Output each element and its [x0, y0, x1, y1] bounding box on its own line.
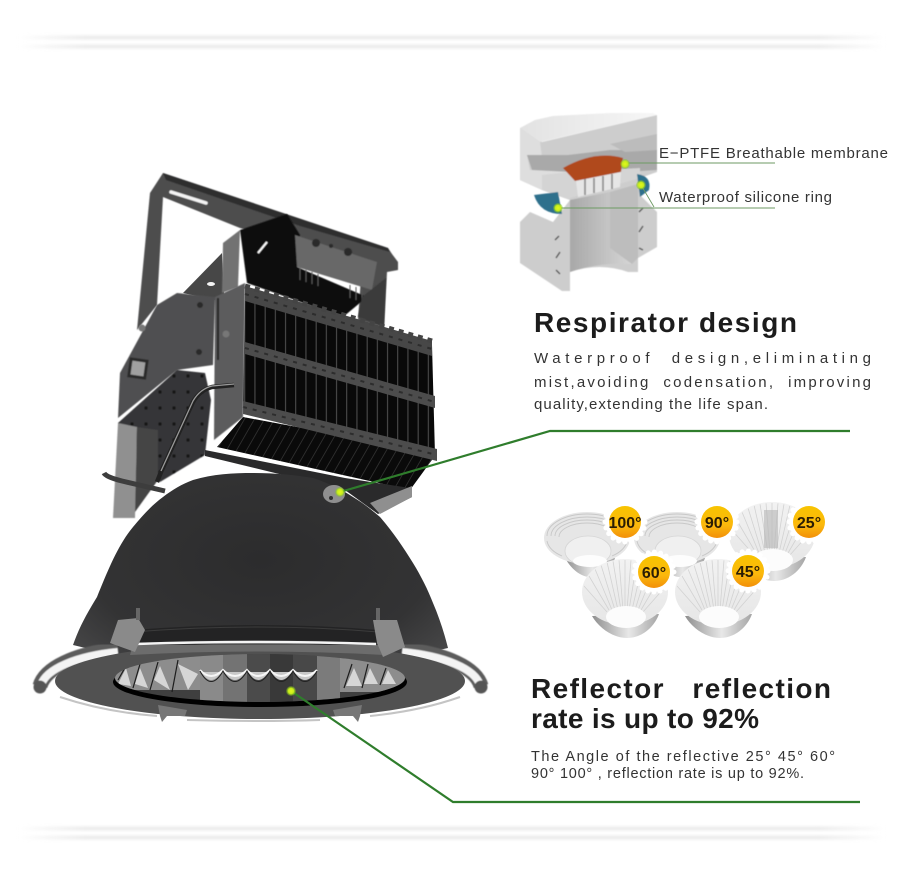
inner cavity: [570, 192, 632, 272]
text: respirator description: [534, 350, 871, 413]
left screw: [136, 608, 140, 620]
inner wall: [610, 184, 638, 264]
dark plate: [55, 643, 465, 719]
marker: reflector: [286, 686, 296, 696]
right clip: [373, 620, 405, 657]
front opening: [113, 654, 407, 707]
seal left: [534, 192, 562, 214]
badge: 90: [697, 502, 737, 542]
underside plate: [205, 450, 412, 514]
side mount plates: [113, 283, 245, 518]
badge: 45: [728, 551, 768, 591]
base plate below heat sink: [370, 486, 412, 514]
text: reflector description: 90° 100° , reflection rate is up to 92%.: [531, 766, 804, 782]
heading: reflector: rate is up to 92%: [531, 703, 759, 734]
badge: 100: 100°: [608, 515, 642, 532]
mounting bracket: [137, 173, 398, 330]
membrane: [563, 156, 623, 181]
cable: [157, 384, 234, 482]
badge: 60: 60°: [642, 565, 666, 582]
badge: 25: 25°: [797, 515, 821, 532]
cup: 45: [675, 559, 761, 638]
text: reflector description: The Angle of the reflective 25° 45° 60°: [531, 749, 835, 765]
vent marks: [555, 208, 643, 274]
main fins: [243, 288, 435, 455]
badge: 100: [605, 502, 645, 542]
cap left: [520, 128, 570, 190]
slot: [527, 150, 657, 172]
teeth: [576, 172, 621, 197]
upper heat sink: [222, 214, 386, 327]
lower clips: [158, 705, 362, 722]
heading: reflector: [531, 673, 831, 734]
badge: 25: [789, 502, 829, 542]
marker: respirator: [335, 487, 345, 497]
cable handle: [104, 473, 165, 491]
breather valve: [323, 485, 345, 503]
leader line: reflector: [291, 691, 860, 802]
cup: 90: [634, 512, 720, 577]
text: respirator description: Waterproof design,eliminating: [534, 350, 871, 367]
heading: respirator design: Respirator design: [534, 307, 797, 338]
bottom divider: [18, 827, 886, 839]
back plate: [183, 253, 224, 300]
text: respirator description: quality,extending the life span.: [534, 396, 768, 413]
dome: [73, 473, 448, 690]
cup: 25: [729, 502, 815, 581]
left clip: [110, 618, 145, 652]
badge: 90: 90°: [705, 515, 729, 532]
silver ring: [34, 649, 488, 694]
bottom fins: [217, 417, 437, 490]
respirator cutaway diagram: [520, 113, 657, 291]
text: respirator description: mist,avoiding codensation, improving: [534, 374, 871, 391]
body silhouette: [520, 115, 657, 291]
text: reflector description: [531, 749, 835, 782]
seal right: [637, 174, 650, 197]
heat sink bands: [243, 286, 437, 461]
ring pointer: [553, 180, 775, 213]
badge: 45: 45°: [736, 564, 760, 581]
membrane label: E−PTFE Breathable membrane: [659, 145, 888, 162]
badge: 60: [634, 552, 674, 592]
membrane pointer: [620, 159, 775, 169]
top divider: [18, 36, 886, 48]
lower rim highlight: [60, 697, 460, 721]
top rim band: [130, 625, 385, 655]
cup: 100: [544, 512, 630, 577]
right screw: [376, 608, 380, 620]
flange: [542, 168, 640, 200]
cap top: [520, 113, 657, 142]
cup: 60: [582, 559, 668, 638]
leader line: respirator: [340, 431, 850, 492]
lamp illustration: [34, 173, 488, 722]
heading: reflector: Reflector reflection: [531, 673, 831, 704]
ring label: Waterproof silicone ring: [659, 189, 832, 206]
reflector cups: [544, 502, 815, 638]
